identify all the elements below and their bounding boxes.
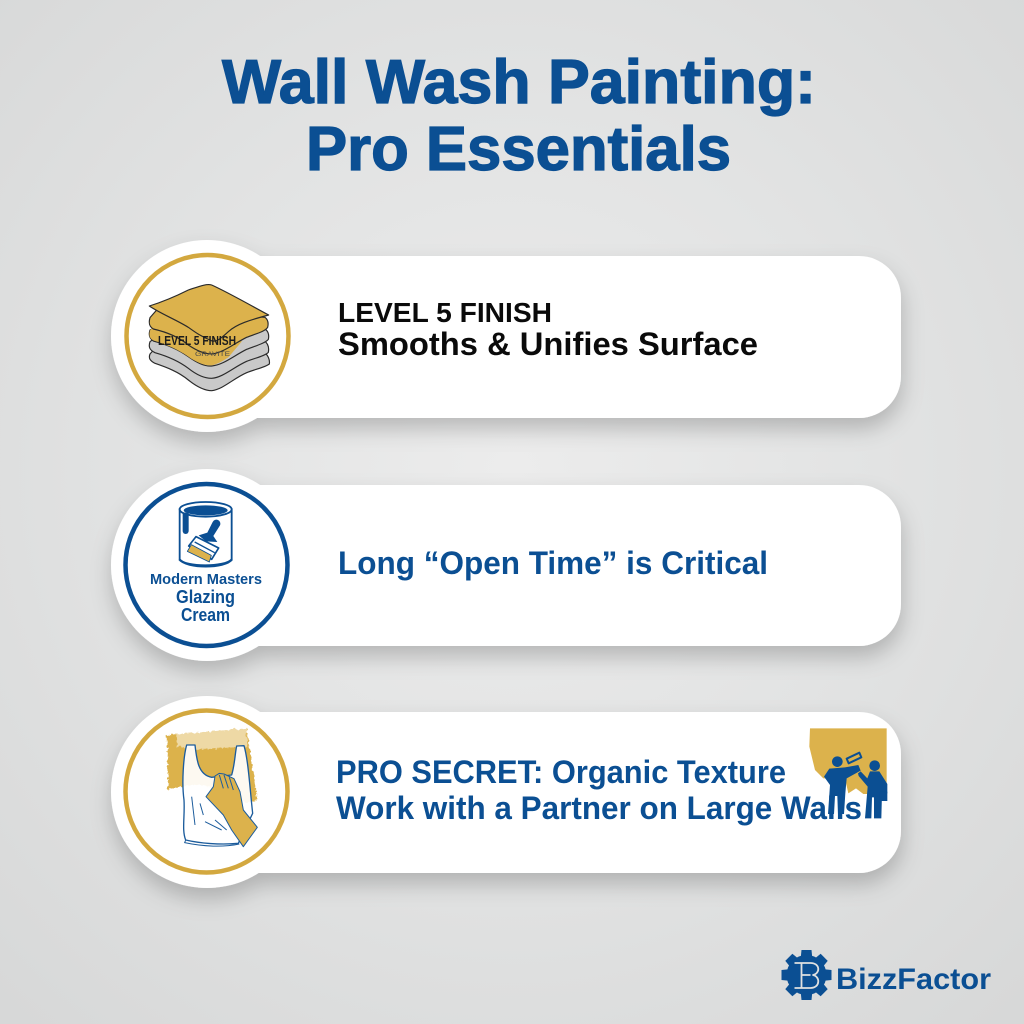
icon: layered finish ring — [126, 255, 288, 417]
icon text: level 5 finish: LEVEL 5 FINISH — [158, 334, 236, 348]
icon text: small scribble: GRAVITE — [195, 351, 231, 358]
logo text: BizzFactor — [836, 963, 991, 996]
icon text: modern masters: Modern Masters — [150, 572, 262, 588]
card text: smooths and unifies surface: Smooths & Unifies Surface — [338, 326, 758, 362]
card text: level 5 finish: LEVEL 5 FINISH — [338, 297, 552, 328]
card text: pro secret organic texture: PRO SECRET: Organic Texture — [336, 754, 786, 790]
title: Wall Wash Painting: — [222, 48, 816, 117]
icon: gear B — [782, 950, 832, 1000]
panel: level 5 finish — [111, 240, 901, 432]
card text: work with a partner: Work with a Partner on Large Walls — [336, 790, 862, 826]
icon: paint can ring — [126, 484, 288, 646]
icon: plastic bag and glove ring — [126, 710, 288, 872]
icon: two painters on gold wall — [809, 728, 887, 818]
icon text: cream: Cream — [181, 605, 230, 625]
icon text: glazing: Glazing — [176, 587, 235, 607]
card text: long open time: Long “Open Time” is Critical — [338, 545, 768, 581]
logo: BizzFactor — [782, 950, 991, 1000]
panel: open time — [111, 469, 901, 661]
panel: pro secret — [111, 696, 901, 888]
title — [222, 48, 816, 184]
title: Pro Essentials — [306, 115, 731, 184]
